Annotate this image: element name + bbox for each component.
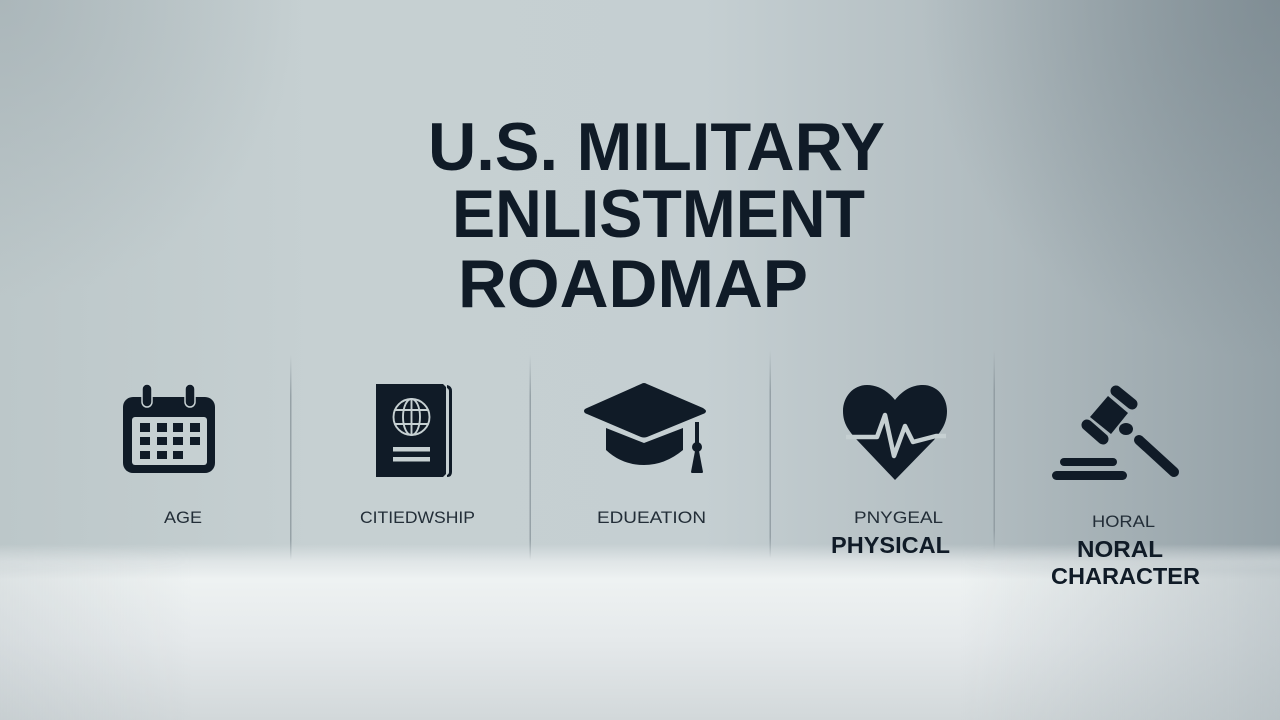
label: moral small: HORAL	[1092, 512, 1155, 531]
icon: heart with pulse	[843, 385, 947, 480]
label: age: AGE	[164, 508, 202, 527]
column: moral character	[1051, 391, 1200, 589]
title: U.S. MILITARY	[428, 109, 885, 185]
column dividers	[290, 350, 995, 560]
icon: calendar	[123, 384, 215, 473]
label: moral: NORAL	[1077, 536, 1163, 562]
label: character: CHARACTER	[1051, 563, 1200, 589]
icon: graduation cap	[584, 383, 706, 473]
column: education	[584, 383, 706, 527]
column: physical	[831, 385, 950, 558]
column: citizenship	[360, 384, 475, 527]
label: physical: PHYSICAL	[831, 532, 950, 558]
title: ROADMAP	[458, 246, 808, 322]
column: age	[123, 384, 215, 527]
title: ENLISTMENT	[452, 176, 865, 252]
icon: gavel	[1052, 391, 1174, 480]
label: citizenship: CITIEDWSHIP	[360, 508, 475, 527]
label: physical small: PNYGEAL	[854, 508, 943, 527]
icon: passport	[376, 384, 452, 477]
label: education: EDUEATION	[597, 508, 706, 527]
title	[428, 109, 885, 322]
